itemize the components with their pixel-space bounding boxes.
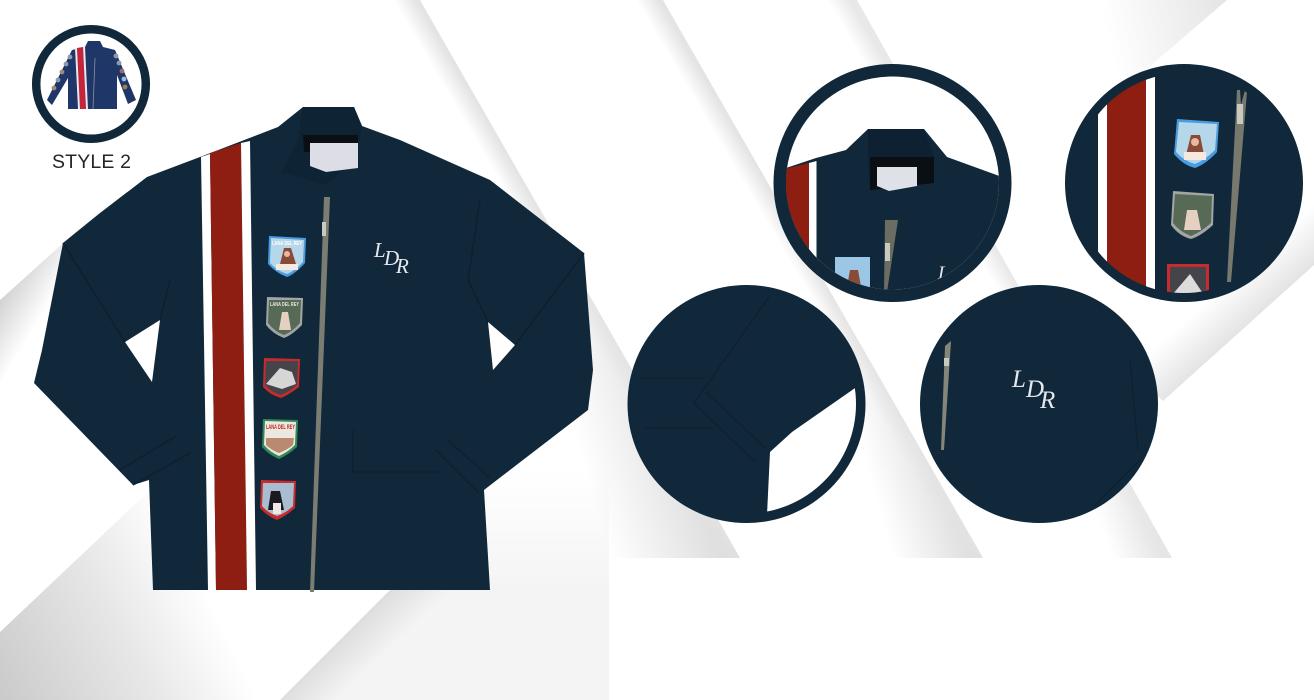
embroidered monogram: D — [383, 246, 399, 270]
pocket flap — [353, 430, 440, 472]
detail circle: monogram — [920, 285, 1158, 523]
zipper pull — [322, 222, 326, 236]
jacket body and sleeves — [34, 107, 593, 590]
chest zipper — [941, 341, 951, 450]
patch: red portrait album — [260, 480, 296, 520]
icon: miniature jacket — [47, 41, 136, 109]
embroidered monogram — [1011, 366, 1055, 414]
armpit gap right — [488, 322, 515, 370]
patch: grey album — [1171, 191, 1214, 239]
patch: blue album — [1174, 119, 1219, 168]
embroidered monogram: R — [395, 254, 409, 278]
neck label — [877, 167, 917, 191]
main jacket — [34, 107, 593, 592]
patch close-up — [835, 257, 870, 288]
front zipper — [310, 197, 330, 592]
armpit gap left — [125, 320, 160, 382]
embroidered monogram: D — [1025, 376, 1044, 403]
heading: style label: STYLE 2 — [52, 151, 131, 173]
collar — [282, 107, 362, 185]
cuff seams — [640, 297, 769, 462]
embroidered monogram: R — [1039, 387, 1055, 414]
fabric folds — [1095, 360, 1140, 505]
patch: green album: LANA DEL REY — [266, 425, 295, 431]
patch: grey album: LANA DEL REY — [270, 302, 300, 308]
embroidered monogram — [373, 238, 409, 278]
patch: blue album — [268, 236, 306, 277]
inner collar — [868, 129, 934, 182]
patch: red black and white album — [263, 358, 300, 398]
patch: grey album — [266, 297, 303, 338]
sleeve badges — [52, 54, 127, 90]
embroidered monogram: L — [1011, 366, 1026, 393]
stripes close-up — [786, 163, 809, 249]
monogram letter: L — [937, 263, 949, 284]
stripes close-up — [1098, 104, 1107, 262]
zipper pull — [944, 358, 949, 366]
zipper close-up — [1227, 90, 1247, 282]
patch: blue album: LANA DEL REY — [272, 241, 303, 247]
racing stripes — [201, 141, 256, 590]
detail circle: badges — [1065, 60, 1303, 304]
style thumbnail badge — [36, 29, 146, 139]
detail circle: collar — [774, 64, 1012, 310]
patch: red album — [1167, 264, 1209, 293]
zipper close-up — [884, 220, 898, 292]
white gap beside sleeve — [767, 388, 856, 512]
sleeve folds — [63, 200, 584, 492]
patch: green album — [262, 419, 298, 459]
embroidered monogram: L — [373, 238, 386, 262]
detail circle: cuff — [628, 285, 866, 523]
collar close-up fabric — [786, 129, 999, 290]
